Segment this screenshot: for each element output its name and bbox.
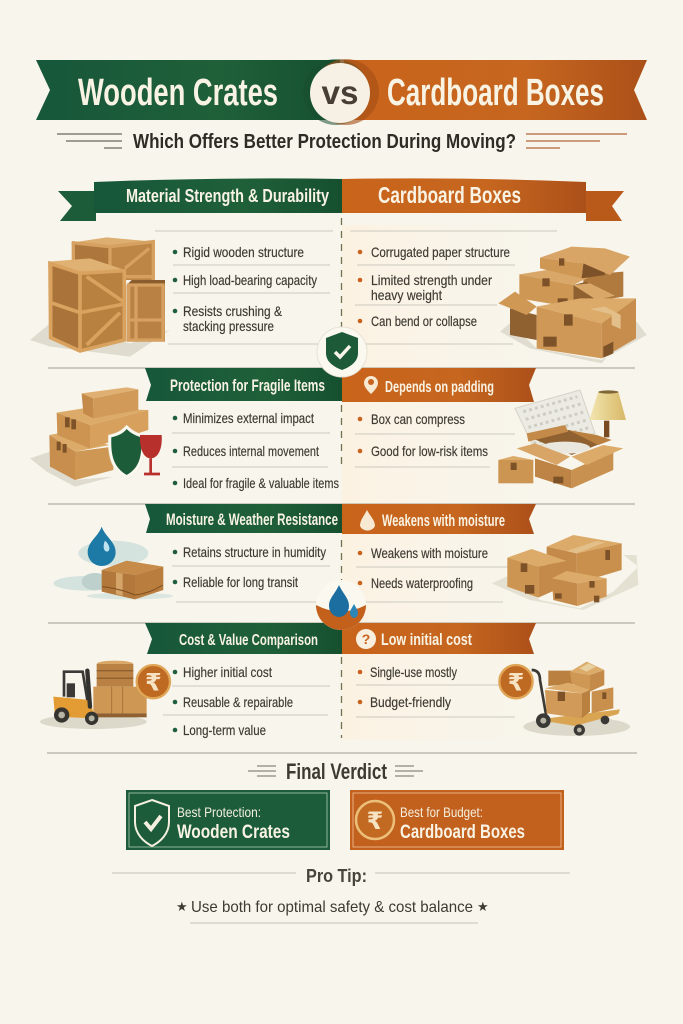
subtitle: Which Offers Better Protection During Moving? [133,131,516,153]
section 2 ribbon: fragile: Protection for Fragile Items [170,377,325,395]
bullets: fragile cardboard [355,411,515,467]
icon: boxes with shield and wine glass [30,387,162,487]
badge: water drops [316,580,366,630]
bullets: fragile wooden: Reduces internal movement [183,443,319,459]
icon: forklift with crates and rupee coin: ₹ [145,669,162,697]
bullets: material strength wooden: Rigid wooden structure [183,244,304,260]
section divider [48,367,635,369]
bullets: moisture cardboard: Weakens with moisture [371,545,488,561]
title banner [36,59,647,125]
icon: water drop and damp box [53,527,173,599]
verdict card: cardboard boxes [350,790,564,850]
bullets: moisture cardboard: Needs waterproofing [371,575,473,591]
bullets: material strength cardboard: heavy weight [371,287,442,303]
icon: rupee coin [356,801,394,839]
bullets: fragile wooden: Minimizes external impact [183,410,314,426]
bullets: cost cardboard: Single-use mostly [370,664,457,680]
bullets: material strength cardboard: Limited strength under [371,272,492,288]
pro tip text: ★ [477,900,489,915]
icon: hand truck with boxes and rupee coin [499,662,630,736]
section 1 ribbon: material strength: Material Strength & Durability [126,186,329,206]
center dashed divider [340,218,342,738]
section 2 ribbon: fragile [145,368,536,402]
verdict card: cardboard boxes: Cardboard Boxes [400,822,525,843]
section divider [47,752,637,754]
bullets: cost wooden: Long-term value [183,722,266,738]
vs badge: vs [322,74,358,111]
bullets: cost cardboard: Budget-friendly [370,694,451,710]
bullets: cost wooden: Higher initial cost [183,664,272,680]
bullets: material strength wooden [155,231,333,344]
pro tip text [176,899,489,923]
pro tip text: Use both for optimal safety & cost balance [191,899,473,916]
section 1 ribbon: material strength: Cardboard Boxes [378,182,521,208]
bullets: moisture wooden [172,544,330,602]
bullets: material strength wooden: Resists crushing & [183,303,283,319]
verdict card: cardboard boxes: Best for Budget: [400,804,483,820]
verdict card: wooden crates: Wooden Crates [177,822,290,843]
vs badge [303,59,379,125]
section 4 ribbon: cost: ? [362,631,370,647]
section divider [48,622,635,624]
section 3 ribbon: moisture [145,504,536,534]
icon: rupee coin: ₹ [367,807,383,835]
final verdict heading: Final Verdict [286,759,388,784]
icon: wooden crates stack [30,237,170,357]
bullets: moisture cardboard [356,545,515,602]
section 3 ribbon: moisture: Moisture & Weather Resistance [166,511,338,529]
section 4 ribbon: cost: Low initial cost [381,631,472,649]
bullets: cost wooden: Reusable & repairable [183,694,293,710]
banner left: wooden crates [36,60,340,120]
section 4 ribbon: cost: Cost & Value Comparison [179,632,318,649]
bullets: material strength wooden: High load-bearing capacity [183,272,317,288]
banner left: wooden crates: Wooden Crates [78,72,278,114]
pro tip text: ★ [176,900,188,915]
bullets: moisture wooden: Retains structure in humidity [183,544,326,560]
icon: hand truck with boxes and rupee coin: ₹ [508,669,524,697]
bullets: material strength wooden: stacking pressure [183,318,274,334]
icon: damp cardboard boxes [492,535,638,610]
section 2 ribbon: fragile: Depends on padding [385,379,494,396]
icon: stacked cardboard boxes [498,247,647,363]
bullets: material strength cardboard: Can bend or collapse [371,313,477,329]
verdict card: wooden crates: Best Protection: [177,804,261,820]
bullets: fragile wooden [172,410,339,491]
verdict card: wooden crates [126,790,330,850]
bullets: cost cardboard [356,664,515,717]
bullets: material strength cardboard: Corrugated paper structure [371,244,510,260]
banner right: cardboard boxes [344,60,647,120]
section 1 ribbon: material strength [58,178,624,221]
icon: forklift with crates and rupee coin [40,661,170,729]
bullets: moisture wooden: Reliable for long transit [183,574,298,590]
bullets: fragile cardboard: Good for low-risk items [371,443,488,459]
bullets: material strength cardboard [350,231,557,344]
pro tip heading: Pro Tip: [306,866,367,886]
section divider [48,503,635,505]
icon: shield check [135,800,169,846]
right column warm tint [342,225,592,740]
section 4 ribbon: cost [145,623,536,654]
icon: open box with bubble wrap and lamp [498,390,626,488]
bullets: fragile cardboard: Box can compress [371,411,465,427]
bullets: fragile wooden: Ideal for fragile & valuable items [183,475,339,491]
section 3 ribbon: moisture: Weakens with moisture [382,512,505,530]
badge: shield [317,327,367,377]
bullets: cost wooden [163,664,330,738]
